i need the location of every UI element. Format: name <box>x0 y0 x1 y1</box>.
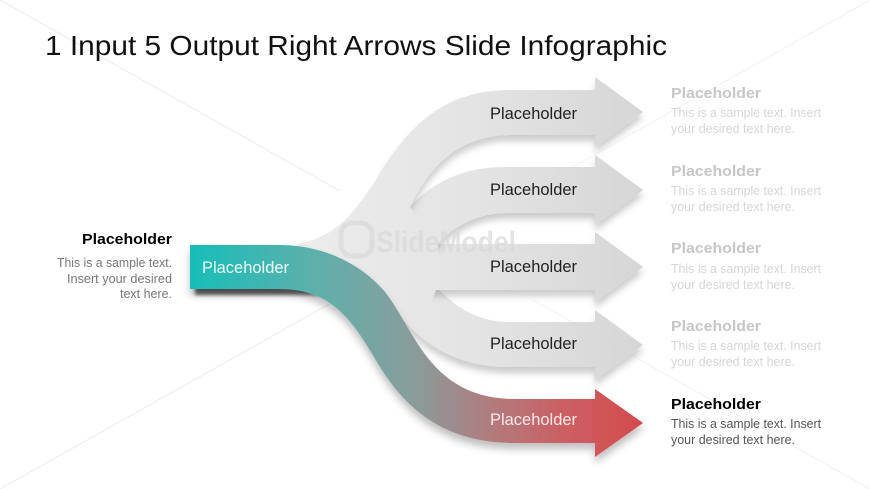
arrow 2: gray output <box>405 155 643 250</box>
input description: Insert your desired <box>67 272 172 286</box>
output 1 description <box>671 85 822 136</box>
arrow 3: gray output <box>400 232 643 302</box>
input description: Placeholder <box>82 231 172 248</box>
output 3 description: Placeholder <box>671 240 761 257</box>
output 3 description: your desired text here. <box>671 278 795 292</box>
input description: text here. <box>120 287 172 301</box>
input description: This is a sample text. <box>57 256 172 270</box>
output 1 description: Placeholder <box>671 85 761 102</box>
input label: Placeholder <box>202 259 290 277</box>
watermark: SlideModel <box>376 226 516 259</box>
arrow 1: gray output: Placeholder <box>490 105 578 123</box>
highlighted flow: input to red output arrow <box>190 245 643 457</box>
output 4 description <box>671 318 822 369</box>
input description <box>57 231 172 301</box>
output 4 description: your desired text here. <box>671 355 795 369</box>
arrow 3: gray output: Placeholder <box>490 258 578 276</box>
arrow 4: gray output <box>350 255 643 380</box>
output 2 description: This is a sample text. Insert <box>671 184 822 198</box>
output label: Placeholder <box>490 411 578 429</box>
arrow 2: gray output: Placeholder <box>490 181 578 199</box>
output 3 description: This is a sample text. Insert <box>671 262 822 276</box>
input shadow <box>195 285 320 295</box>
output 2 description: Placeholder <box>671 163 761 180</box>
arrow 4: gray output: Placeholder <box>490 335 578 353</box>
output 3 description <box>671 240 822 292</box>
output 4 description: This is a sample text. Insert <box>671 339 822 353</box>
arrow 1: gray output <box>380 77 643 207</box>
gray hub joining the arrows <box>297 148 438 328</box>
output 5 description (active): Placeholder <box>671 396 761 413</box>
output 4 description: Placeholder <box>671 318 761 335</box>
watermark: .com <box>517 245 535 254</box>
output 5 description (active): This is a sample text. Insert <box>671 417 822 431</box>
output 1 description: This is a sample text. Insert <box>671 106 822 120</box>
output 2 description: your desired text here. <box>671 200 795 214</box>
title: 1 Input 5 Output Right Arrows Slide Infographic <box>45 30 667 61</box>
output 5 description (active) <box>671 396 822 447</box>
output 1 description: your desired text here. <box>671 122 795 136</box>
output 5 description (active): your desired text here. <box>671 433 795 447</box>
output 2 description <box>671 163 822 214</box>
